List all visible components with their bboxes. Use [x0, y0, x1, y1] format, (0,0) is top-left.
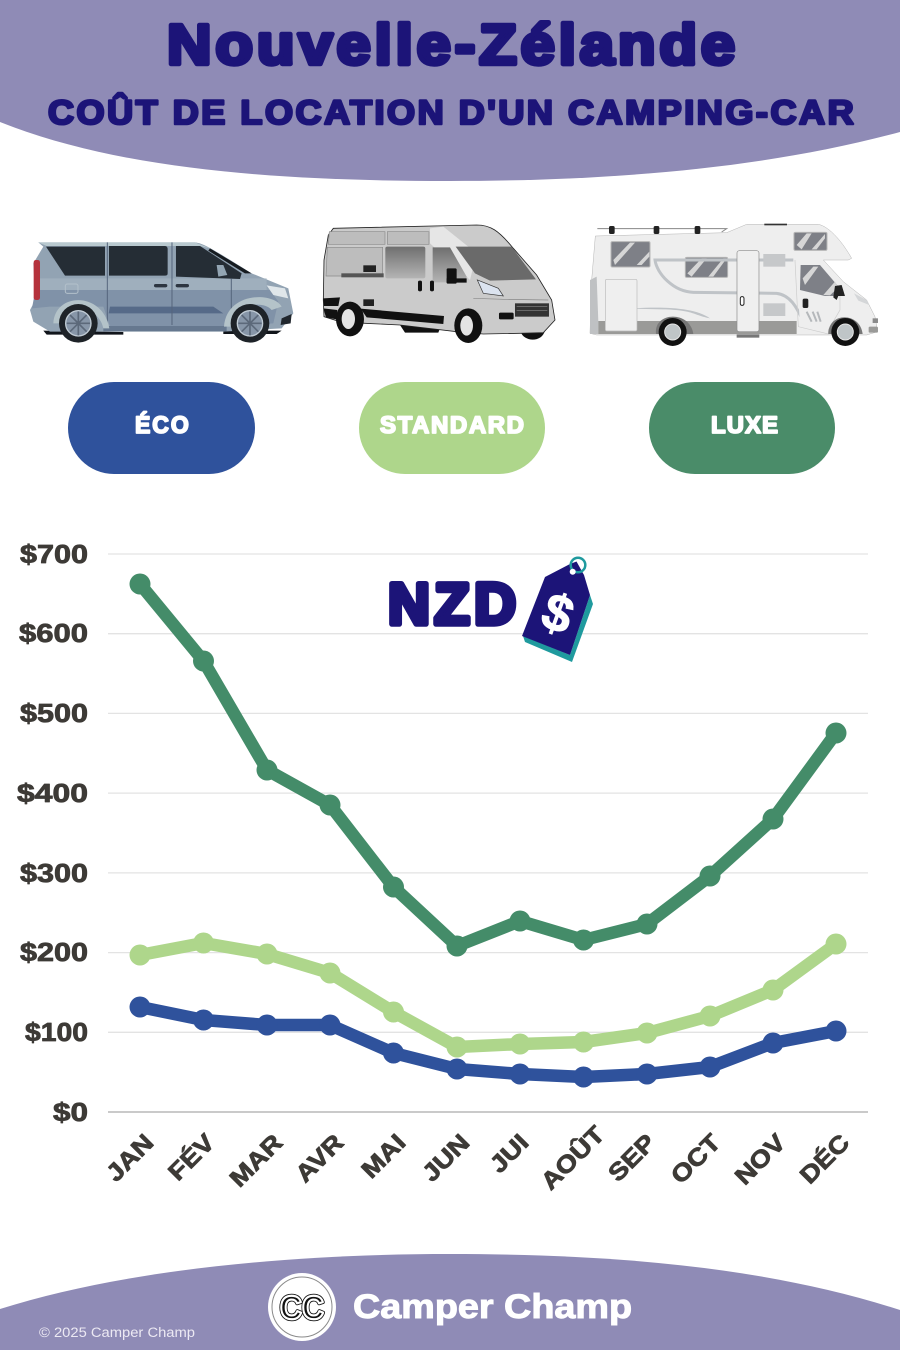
footer banner [0, 1254, 900, 1350]
y-axis labels [17, 539, 88, 1127]
x-axis month labels: MAR [225, 1129, 288, 1192]
pill: Luxe [649, 382, 835, 474]
x-axis month labels: JAN [102, 1130, 159, 1187]
brand name: Camper Champ [353, 1288, 632, 1326]
pill: Luxe: LUXE [711, 412, 778, 439]
pill: Éco [68, 382, 255, 474]
x-axis month labels: JUN [418, 1130, 475, 1187]
logo badge: CC [280, 1289, 324, 1326]
icon: standard camper van [323, 225, 555, 343]
pill: Standard: STANDARD [380, 412, 524, 439]
y-axis labels: $500 [20, 698, 88, 728]
logo badge [268, 1273, 336, 1341]
series: Éco [130, 996, 846, 1088]
currency label: NZD [388, 572, 516, 637]
x-axis month labels: AVR [291, 1129, 349, 1188]
icon: economy minivan [30, 242, 293, 343]
icon: price tag: $ [534, 582, 581, 646]
pill: Éco: ÉCO [135, 411, 189, 438]
icon: price tag [522, 558, 593, 662]
title: Nouvelle-Zélande [167, 12, 735, 76]
y-axis labels: $400 [17, 778, 88, 808]
x-axis month labels: AOÛT [535, 1120, 610, 1195]
series: Standard [130, 932, 846, 1058]
series: Luxe [130, 574, 846, 956]
icon: luxury motorhome [590, 224, 878, 346]
line chart [17, 539, 868, 1195]
header banner [0, 0, 900, 181]
x-axis month labels: OCT [666, 1129, 726, 1189]
x-axis month labels: DÉC [795, 1129, 855, 1189]
x-axis month labels: NOV [730, 1129, 791, 1190]
x-axis month labels: FÉV [163, 1128, 221, 1186]
x-axis month labels: JUI [485, 1130, 534, 1178]
y-axis labels: $700 [20, 539, 88, 569]
pill: Standard [359, 382, 545, 474]
y-axis labels: $300 [20, 858, 88, 888]
x-axis month labels [102, 1120, 855, 1195]
logo badge: CC [280, 1289, 324, 1326]
y-axis labels: $200 [20, 937, 88, 967]
subtitle: COÛT DE LOCATION D'UN CAMPING-CAR [48, 93, 854, 132]
y-axis labels: $100 [25, 1017, 88, 1047]
x-axis month labels: MAI [357, 1130, 411, 1184]
y-axis labels: $600 [19, 618, 88, 648]
copyright: © 2025 Camper Champ [39, 1325, 195, 1340]
x-axis month labels: SEP [604, 1130, 661, 1187]
y-axis labels: $0 [53, 1097, 88, 1127]
